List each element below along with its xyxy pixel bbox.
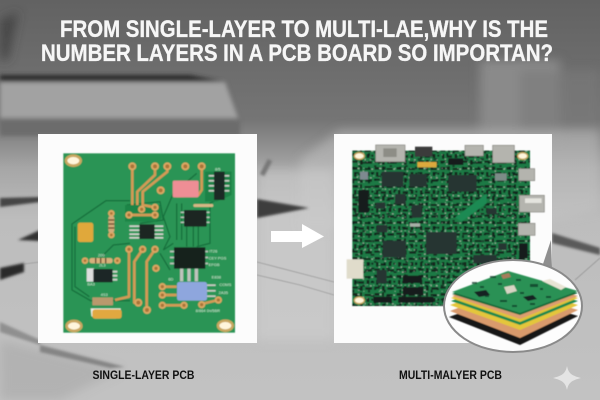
board silk text: E838 xyxy=(212,274,222,279)
components xyxy=(173,181,199,197)
board xyxy=(63,153,235,333)
arrow: single to multi xyxy=(271,224,324,248)
inset: layer stack magnifier xyxy=(444,260,582,352)
board silk text: CEY PGS xyxy=(209,255,227,260)
icon: sparkle xyxy=(553,366,581,390)
panel: single-layer PCB xyxy=(38,134,257,343)
board with dense parts xyxy=(352,151,530,306)
dark routed traces xyxy=(72,172,230,301)
board silk text: 4S3 xyxy=(101,292,109,297)
panel: multi-layer PCB xyxy=(334,134,582,352)
board silk text: 2L3 xyxy=(99,263,106,268)
copper traces xyxy=(115,167,218,310)
board silk text: COMS xyxy=(219,282,232,287)
label: multi-layer PCB: MULTI-MALYER PCB xyxy=(399,370,502,382)
board silk text: IT26 xyxy=(209,248,218,253)
connectors xyxy=(376,145,544,235)
board silk text: EFGB xyxy=(209,262,220,267)
board silk text: 6D xyxy=(168,276,174,281)
stacked layers xyxy=(448,313,578,346)
board silk text: 2A35 xyxy=(219,290,229,295)
board silk text: BA3 xyxy=(87,282,96,287)
chips xyxy=(376,172,507,283)
board silk text: 8/864 0n/5BR xyxy=(196,308,220,313)
board silk text: 8/5 xyxy=(215,167,221,172)
arrow: pointer of magnified inset xyxy=(543,240,552,268)
corner holes xyxy=(66,156,233,331)
label: single-layer PCB: SINGLE-LAYER PCB xyxy=(92,370,194,382)
board silk text xyxy=(87,167,232,313)
title xyxy=(41,16,553,67)
board silk text: 200 xyxy=(98,253,105,258)
desk shelf xyxy=(0,75,240,136)
